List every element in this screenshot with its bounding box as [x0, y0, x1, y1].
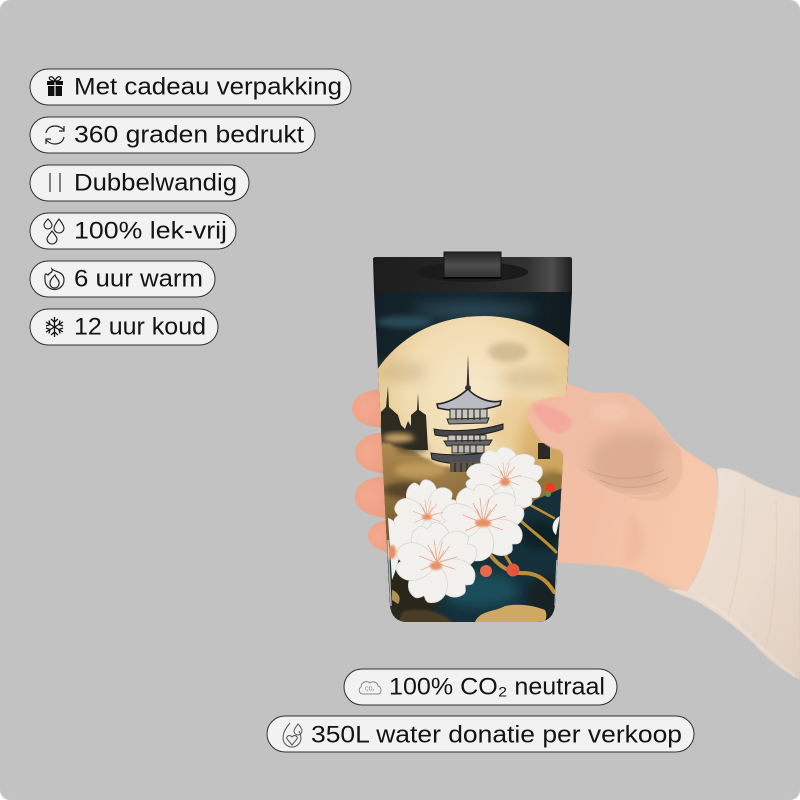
pill: 100% CO2 neutraal — [344, 669, 617, 705]
icon: water drops — [44, 219, 64, 244]
pill: 350L water donatie per verkoop — [267, 716, 694, 752]
pill: 100% CO2 neutraal: 100% CO₂ neutraal — [389, 674, 605, 700]
icon: flame — [45, 269, 64, 290]
orange patch behind blossoms — [458, 538, 478, 556]
thermos cup — [365, 252, 580, 630]
moon — [372, 316, 576, 560]
bottom gold cloud — [475, 604, 546, 622]
gold clouds — [382, 441, 562, 572]
pill: 100% lek-vrij: 100% lek-vrij — [74, 218, 227, 244]
thumbnail — [532, 404, 572, 433]
pill: 12 uur koud: 12 uur koud — [74, 314, 206, 340]
pill: 350L water donatie per verkoop: 350L water donatie per verkoop — [311, 722, 682, 748]
icon: double wall — [50, 173, 60, 192]
cup edge highlights — [388, 540, 391, 606]
hand behind cup — [352, 380, 800, 680]
thumb over cup — [527, 393, 686, 501]
icon: water drop with heart — [283, 723, 302, 747]
pill: Dubbelwandig: Dubbelwandig — [74, 170, 237, 196]
fingers behind cup — [352, 389, 390, 428]
pill: 6 uur warm: 6 uur warm — [74, 266, 203, 292]
sleeve — [667, 468, 800, 680]
wrist shading — [625, 515, 685, 590]
blossoms — [388, 445, 560, 607]
dark lower sky — [388, 488, 562, 622]
pill: Met cadeau verpakking: Met cadeau verpakking — [74, 74, 342, 100]
pill: 6 uur warm — [30, 261, 215, 297]
icon: CO2 cloud: CO₂ — [365, 686, 374, 692]
blossom stamens — [413, 462, 521, 570]
lid recess — [416, 262, 528, 282]
thumb creases — [588, 470, 668, 496]
lid tab — [443, 252, 501, 279]
pill: 100% lek-vrij — [30, 213, 236, 249]
sleeve ribbing — [700, 488, 795, 676]
thumb shaded ridge — [590, 408, 666, 492]
pill: 360 graden bedrukt: 360 graden bedrukt — [74, 122, 304, 148]
pill: 360 graden bedrukt — [30, 117, 315, 153]
pill: Dubbelwandig — [30, 165, 249, 201]
icon: CO2 cloud — [359, 682, 381, 694]
branches — [488, 505, 556, 592]
pill: 12 uur koud — [30, 309, 218, 345]
skyline silhouettes — [381, 386, 428, 450]
pill: Met cadeau verpakking — [30, 69, 351, 105]
cup body with artwork — [374, 292, 572, 622]
berries — [480, 565, 492, 577]
icon: snowflake — [46, 317, 63, 337]
icon: gift — [47, 77, 63, 96]
icon: rotate arrows — [46, 126, 64, 144]
back of hand and wrist — [545, 380, 718, 591]
pagoda — [431, 354, 503, 472]
lid — [373, 257, 572, 292]
